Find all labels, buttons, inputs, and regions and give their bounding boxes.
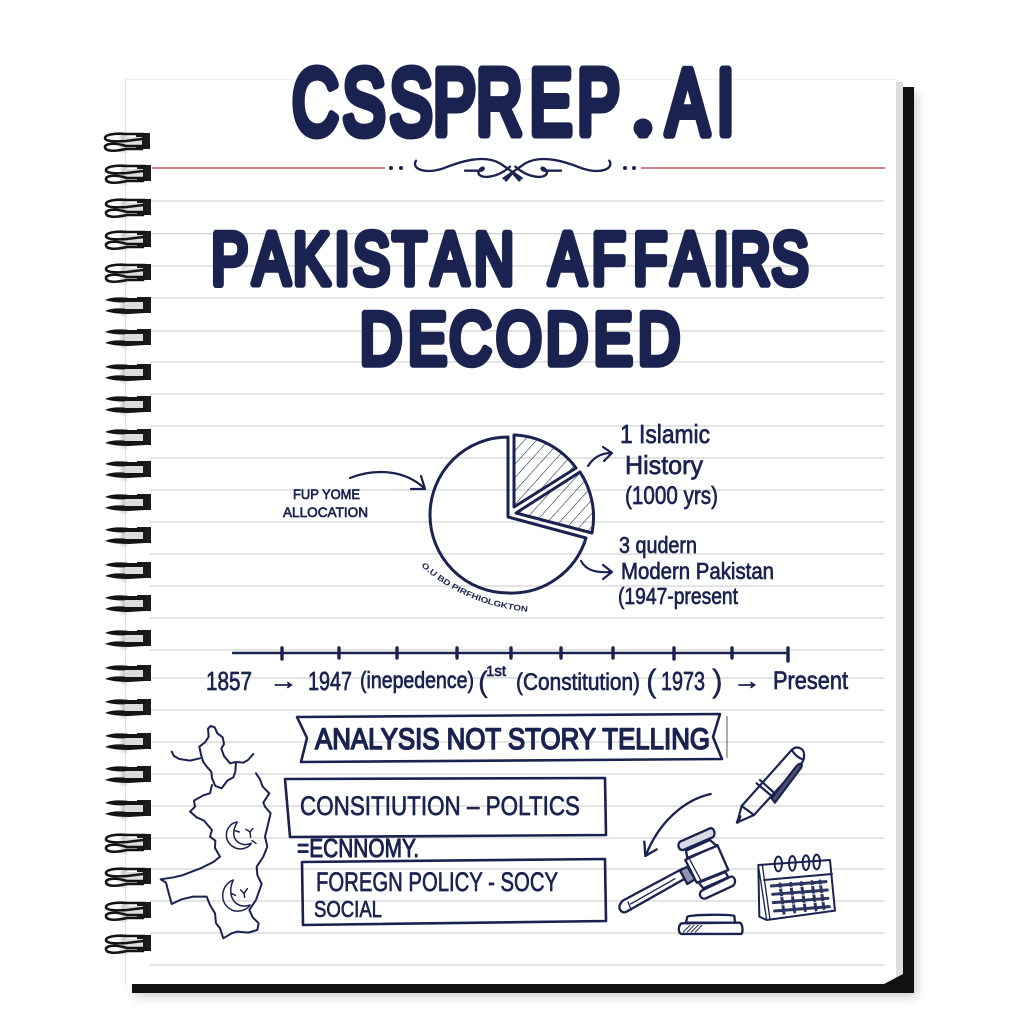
timeline labels: (Constitution)	[516, 669, 640, 696]
hatched slice: second segment	[516, 472, 594, 533]
gavel head	[685, 845, 728, 883]
title: CSSPREP.AI: CSSPREP.AI	[292, 50, 734, 154]
timeline labels: 1973	[661, 666, 705, 696]
heading: Pakistan Affairs Decoded: DECODED	[360, 299, 680, 381]
label: Islamic history: 1 Islamic	[620, 419, 710, 449]
label: Islamic history: History	[625, 450, 703, 480]
red header rule with ornament	[152, 159, 885, 180]
label: allocation	[283, 486, 368, 520]
timeline labels: 1857	[206, 666, 252, 696]
label: modern Pakistan: 3 qudern	[619, 532, 697, 558]
crescent: lower	[223, 880, 250, 911]
crescent: upper	[226, 822, 251, 849]
timeline labels: →	[269, 668, 298, 695]
label: modern Pakistan: (1947-present	[618, 583, 739, 609]
timeline labels: Present	[773, 667, 848, 695]
icon: gavel	[619, 828, 742, 934]
pie chart: syllabus allocation	[422, 434, 596, 612]
timeline labels: →	[733, 668, 761, 695]
arrow: pen to gavel	[644, 794, 711, 856]
box: constitution and politics	[285, 778, 606, 837]
label: allocation: FUP YOME	[293, 486, 360, 502]
banner: analysis not story telling: ANALYSIS NOT STORY TELLING	[315, 723, 710, 756]
ruled lines	[150, 201, 884, 965]
arrow: to Islamic history	[588, 447, 612, 466]
label: modern Pakistan	[618, 532, 774, 609]
timeline labels: (inepedence)	[360, 667, 474, 693]
timeline labels: (	[478, 666, 488, 699]
notebook page	[125, 79, 903, 984]
box: foreign policy and social: FOREGN POLICY - SOCY	[316, 867, 558, 897]
icon: Pakistan map	[161, 726, 271, 938]
gavel handle	[619, 869, 687, 912]
timeline labels	[206, 663, 848, 699]
label: allocation: ALLOCATION	[283, 504, 368, 520]
label: Islamic history: (1000 yrs)	[625, 482, 718, 510]
heading: Pakistan Affairs Decoded	[211, 218, 808, 381]
timeline labels: 1st	[486, 663, 507, 680]
main pie slice	[430, 437, 586, 593]
timeline axis	[233, 648, 788, 661]
label: Islamic history	[620, 419, 718, 510]
spiral binding	[105, 133, 151, 954]
stars: lower	[231, 889, 247, 897]
timeline labels: )	[712, 663, 723, 699]
icon: pen	[737, 748, 804, 822]
box: foreign policy and social: SOCIAL	[314, 896, 382, 922]
curved caption under pie: O.U BD PIRFHIOLGKTON	[422, 563, 528, 612]
heading: Pakistan Affairs Decoded: PAKISTAN AFFAIRS	[211, 218, 808, 300]
stars: upper	[235, 829, 256, 843]
banner: analysis not story telling	[297, 714, 727, 762]
box: constitution and politics: CONSITIUTION – POLTICS	[300, 791, 580, 821]
arrow: allocation to pie	[350, 472, 425, 489]
box: foreign policy and social	[302, 859, 606, 925]
label: economy: =ECNNOMY.	[297, 833, 419, 863]
arrow: to modern Pakistan	[581, 561, 612, 579]
label: modern Pakistan: Modern Pakistan	[621, 558, 774, 584]
notebook back cover	[132, 87, 917, 997]
timeline labels: (	[646, 663, 657, 699]
icon: calendar	[758, 855, 835, 920]
timeline labels: 1947	[308, 666, 352, 696]
sound block	[686, 915, 735, 923]
hatched slice: Islamic history	[514, 435, 576, 507]
